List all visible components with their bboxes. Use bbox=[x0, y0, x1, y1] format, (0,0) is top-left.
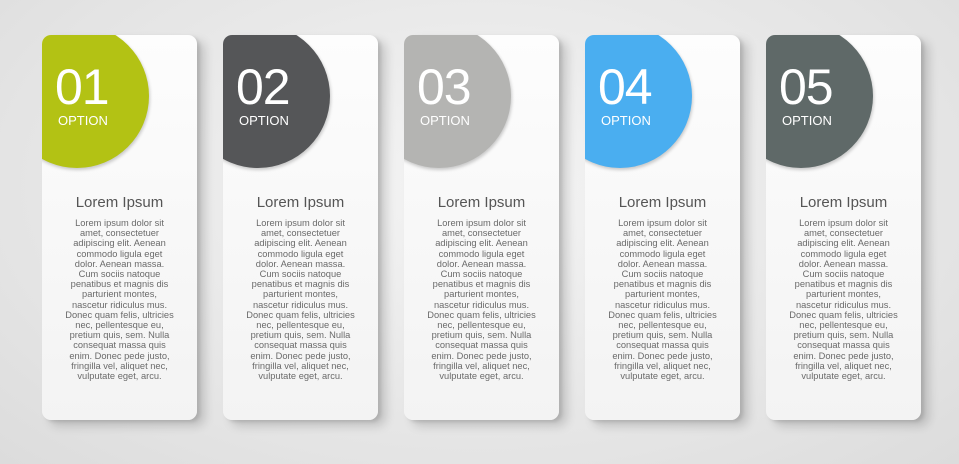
body text: enim. Donec pede justo, bbox=[612, 351, 713, 361]
body text: nec, pellentesque eu, bbox=[437, 320, 526, 330]
number 03: 03 bbox=[417, 59, 471, 115]
body text: Donec quam felis, ultricies bbox=[789, 310, 898, 320]
heading: Lorem Ipsum bbox=[619, 194, 706, 211]
body text bbox=[246, 218, 355, 381]
body text: Cum sociis natoque bbox=[260, 269, 341, 279]
body text: commodo ligula eget bbox=[620, 249, 705, 259]
circle: 02 bbox=[186, 24, 330, 168]
body text: penatibus et magnis dis bbox=[71, 279, 168, 289]
body text: commodo ligula eget bbox=[77, 249, 162, 259]
card 01 bbox=[42, 35, 197, 420]
body text: commodo ligula eget bbox=[439, 249, 524, 259]
number 04: 04 bbox=[598, 59, 652, 115]
body text: Lorem ipsum dolor sit bbox=[618, 218, 707, 228]
body text: vulputate eget, arcu. bbox=[439, 371, 524, 381]
body text: parturient montes, bbox=[806, 289, 881, 299]
body text: adipiscing elit. Aenean bbox=[254, 238, 347, 248]
card 03 bbox=[404, 35, 559, 420]
number 02: 02 bbox=[236, 59, 290, 115]
body text: Cum sociis natoque bbox=[79, 269, 160, 279]
circle: 03 bbox=[367, 24, 511, 168]
body text: dolor. Aenean massa. bbox=[618, 259, 707, 269]
body text: nec, pellentesque eu, bbox=[256, 320, 345, 330]
body text: parturient montes, bbox=[82, 289, 157, 299]
label: option: OPTION bbox=[58, 113, 108, 128]
body text: nec, pellentesque eu, bbox=[75, 320, 164, 330]
body text: amet, consectetuer bbox=[623, 228, 702, 238]
body text: adipiscing elit. Aenean bbox=[73, 238, 166, 248]
body text: Lorem ipsum dolor sit bbox=[75, 218, 164, 228]
body text: pretium quis, sem. Nulla bbox=[794, 330, 893, 340]
body text: enim. Donec pede justo, bbox=[250, 351, 351, 361]
body text: penatibus et magnis dis bbox=[433, 279, 530, 289]
heading: Lorem Ipsum bbox=[800, 194, 887, 211]
heading: Lorem Ipsum bbox=[257, 194, 344, 211]
body text: penatibus et magnis dis bbox=[614, 279, 711, 289]
body text: nascetur ridiculus mus. bbox=[434, 300, 529, 310]
label: option: OPTION bbox=[782, 113, 832, 128]
body text: adipiscing elit. Aenean bbox=[435, 238, 528, 248]
card 05 bbox=[766, 35, 921, 420]
body text: Cum sociis natoque bbox=[622, 269, 703, 279]
body text: penatibus et magnis dis bbox=[252, 279, 349, 289]
body text bbox=[427, 218, 536, 381]
body text: fringilla vel, aliquet nec, bbox=[71, 361, 168, 371]
body text: Cum sociis natoque bbox=[441, 269, 522, 279]
body text: penatibus et magnis dis bbox=[795, 279, 892, 289]
body text: vulputate eget, arcu. bbox=[77, 371, 162, 381]
body text: Lorem ipsum dolor sit bbox=[799, 218, 888, 228]
body text: commodo ligula eget bbox=[801, 249, 886, 259]
circle: 05 bbox=[729, 24, 873, 168]
body text bbox=[65, 218, 174, 381]
body text: dolor. Aenean massa. bbox=[799, 259, 888, 269]
body text: Donec quam felis, ultricies bbox=[608, 310, 717, 320]
body text: enim. Donec pede justo, bbox=[69, 351, 170, 361]
body text: Cum sociis natoque bbox=[803, 269, 884, 279]
body text: fringilla vel, aliquet nec, bbox=[795, 361, 892, 371]
body text: dolor. Aenean massa. bbox=[75, 259, 164, 269]
body text: vulputate eget, arcu. bbox=[620, 371, 705, 381]
body text: amet, consectetuer bbox=[261, 228, 340, 238]
body text bbox=[608, 218, 717, 381]
body text: consequat massa quis bbox=[73, 340, 166, 350]
body text: pretium quis, sem. Nulla bbox=[432, 330, 531, 340]
body text: amet, consectetuer bbox=[804, 228, 883, 238]
body text: Lorem ipsum dolor sit bbox=[256, 218, 345, 228]
number 05: 05 bbox=[779, 59, 833, 115]
body text: consequat massa quis bbox=[254, 340, 347, 350]
body text: fringilla vel, aliquet nec, bbox=[252, 361, 349, 371]
body text: enim. Donec pede justo, bbox=[793, 351, 894, 361]
body text: amet, consectetuer bbox=[442, 228, 521, 238]
label: option: OPTION bbox=[239, 113, 289, 128]
body text: Donec quam felis, ultricies bbox=[246, 310, 355, 320]
body text: parturient montes, bbox=[444, 289, 519, 299]
body text: commodo ligula eget bbox=[258, 249, 343, 259]
body text: fringilla vel, aliquet nec, bbox=[614, 361, 711, 371]
body text: fringilla vel, aliquet nec, bbox=[433, 361, 530, 371]
body text: pretium quis, sem. Nulla bbox=[613, 330, 712, 340]
body text: nec, pellentesque eu, bbox=[799, 320, 888, 330]
body text: parturient montes, bbox=[263, 289, 338, 299]
heading: Lorem Ipsum bbox=[438, 194, 525, 211]
body text: consequat massa quis bbox=[435, 340, 528, 350]
card 04 bbox=[585, 35, 740, 420]
body text: pretium quis, sem. Nulla bbox=[70, 330, 169, 340]
body text: consequat massa quis bbox=[616, 340, 709, 350]
number 01: 01 bbox=[55, 59, 109, 115]
card 02 bbox=[223, 35, 378, 420]
body text: vulputate eget, arcu. bbox=[258, 371, 343, 381]
label: option: OPTION bbox=[601, 113, 651, 128]
body text: pretium quis, sem. Nulla bbox=[251, 330, 350, 340]
body text: vulputate eget, arcu. bbox=[801, 371, 886, 381]
body text: nascetur ridiculus mus. bbox=[615, 300, 710, 310]
body text: nascetur ridiculus mus. bbox=[796, 300, 891, 310]
body text: nascetur ridiculus mus. bbox=[253, 300, 348, 310]
circle: 01 bbox=[5, 24, 149, 168]
heading: Lorem Ipsum bbox=[76, 194, 163, 211]
body text: Donec quam felis, ultricies bbox=[65, 310, 174, 320]
body text bbox=[789, 218, 898, 381]
body text: consequat massa quis bbox=[797, 340, 890, 350]
body text: adipiscing elit. Aenean bbox=[616, 238, 709, 248]
body text: amet, consectetuer bbox=[80, 228, 159, 238]
circle: 04 bbox=[548, 24, 692, 168]
body text: dolor. Aenean massa. bbox=[437, 259, 526, 269]
body text: nec, pellentesque eu, bbox=[618, 320, 707, 330]
body text: nascetur ridiculus mus. bbox=[72, 300, 167, 310]
body text: adipiscing elit. Aenean bbox=[797, 238, 890, 248]
label: option: OPTION bbox=[420, 113, 470, 128]
body text: enim. Donec pede justo, bbox=[431, 351, 532, 361]
body text: dolor. Aenean massa. bbox=[256, 259, 345, 269]
body text: Lorem ipsum dolor sit bbox=[437, 218, 526, 228]
body text: Donec quam felis, ultricies bbox=[427, 310, 536, 320]
body text: parturient montes, bbox=[625, 289, 700, 299]
